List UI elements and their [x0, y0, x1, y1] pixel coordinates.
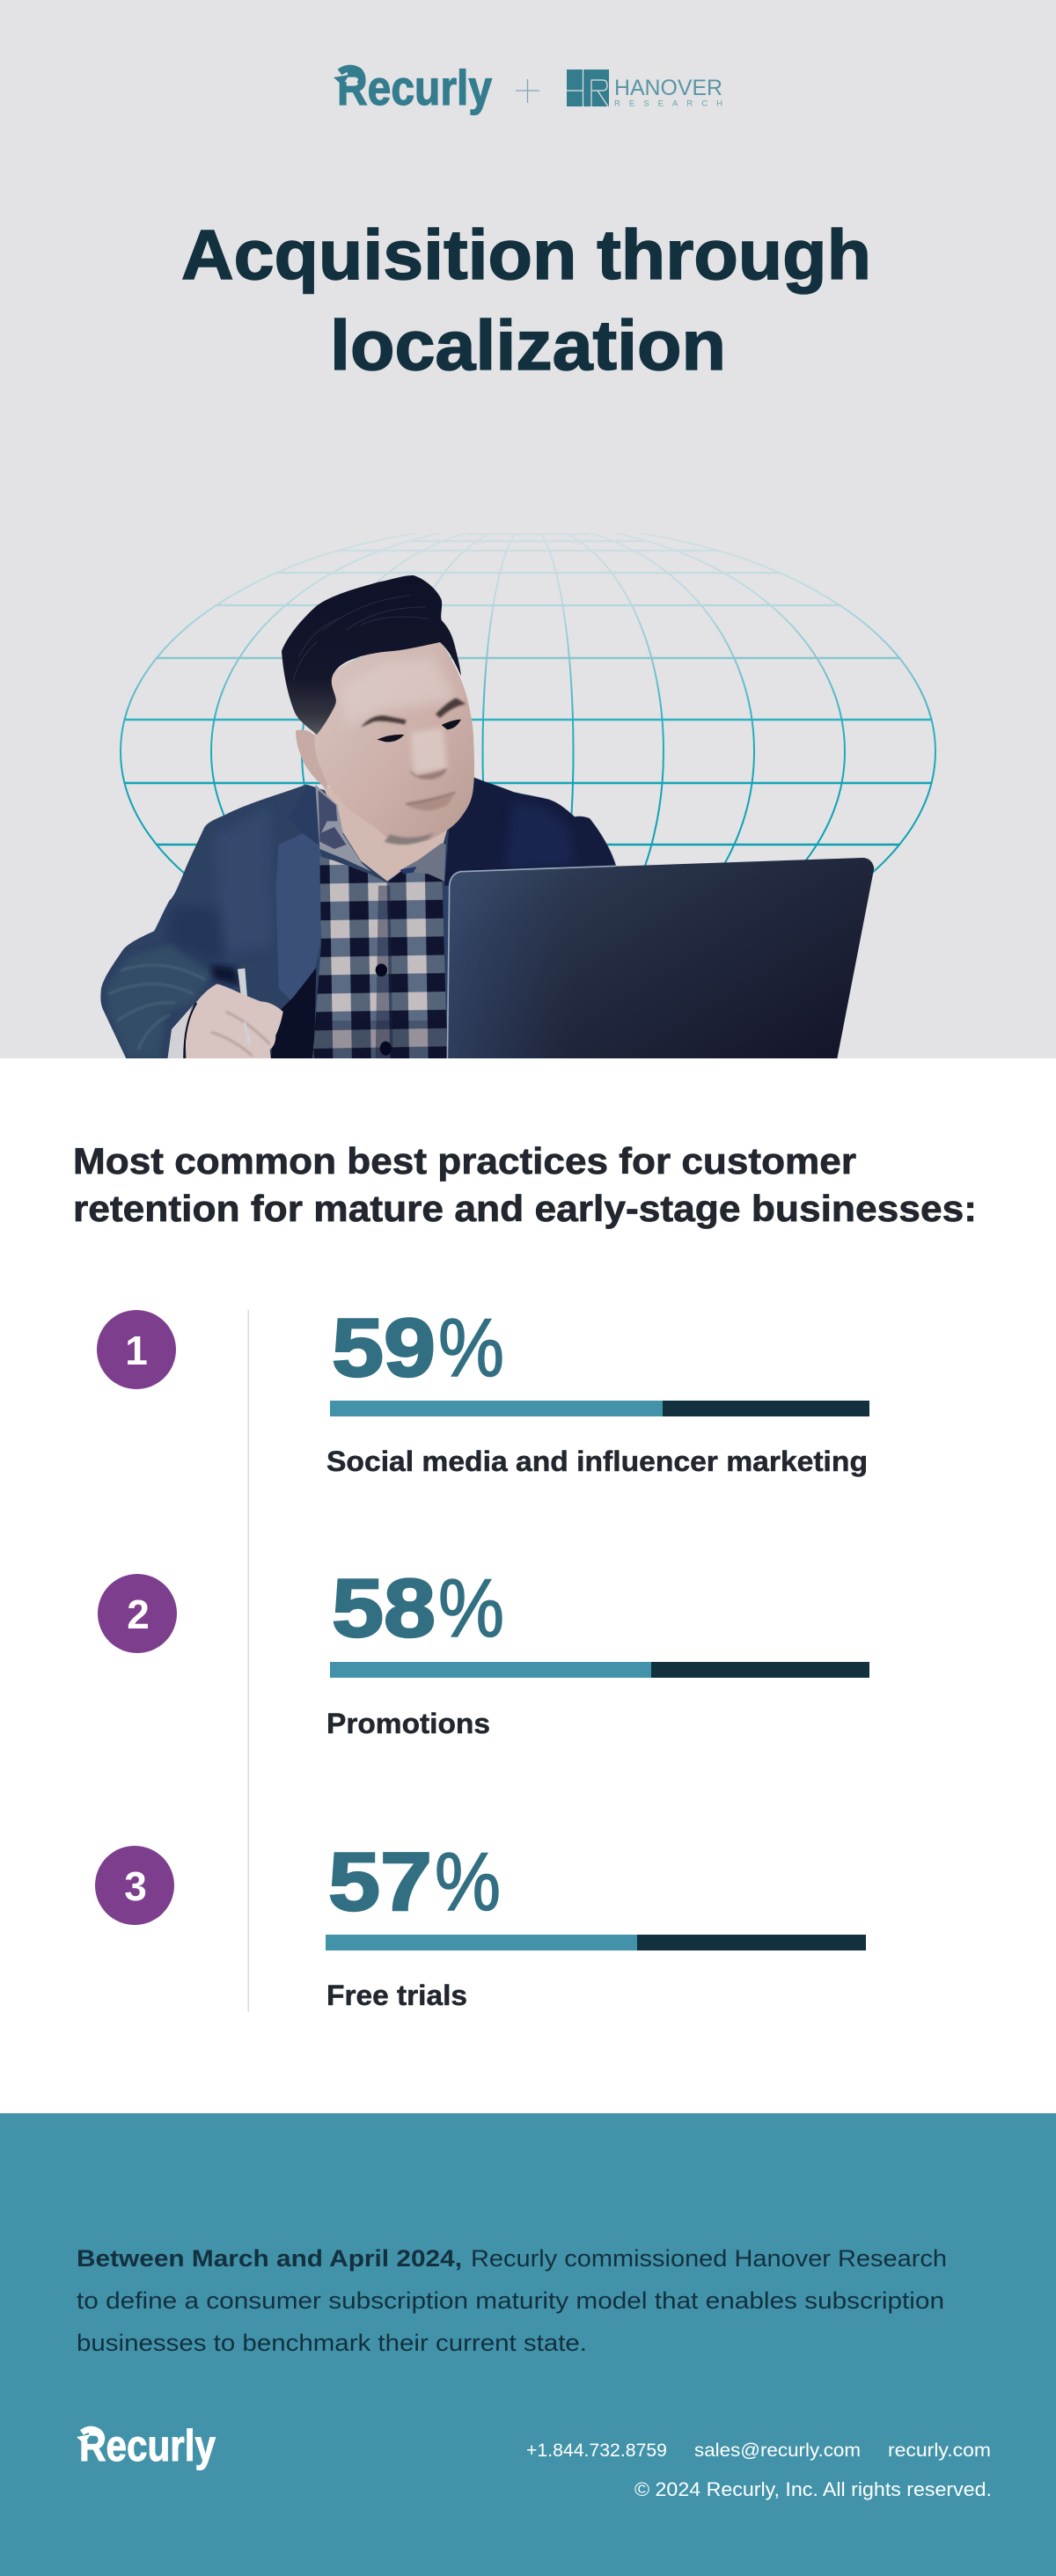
value 58%: 58	[332, 1562, 436, 1654]
jacket	[100, 778, 616, 1058]
ranked item 2	[98, 1562, 869, 1739]
logo: Recurly: Recurly	[337, 60, 492, 115]
ranked item 2: %	[438, 1562, 504, 1654]
divider line	[248, 1310, 249, 2012]
methodology text: Recurly commissioned Hanover Research	[471, 2245, 947, 2272]
label: social media: Social media and influencer marketing	[326, 1445, 868, 1477]
logo: Recurly white: Recurly	[79, 2421, 216, 2470]
methodology text: Between March and April 2024,	[77, 2245, 462, 2272]
photo: man with laptop	[100, 575, 874, 1062]
copyright: © 2024 Recurly, Inc. All rights reserved.	[634, 2478, 992, 2500]
laptop	[447, 858, 874, 1062]
number badge 2: 2	[127, 1592, 150, 1637]
progress bar 57%	[326, 1935, 866, 1950]
ranked item 1	[97, 1301, 869, 1477]
ranked item 3: %	[435, 1835, 501, 1928]
logo: Hanover Research	[567, 70, 722, 109]
title: Acquisition through	[181, 216, 871, 294]
hair	[282, 575, 461, 735]
contact details: sales@recurly.com	[694, 2441, 861, 2461]
globe grid	[120, 533, 936, 874]
label: promotions: Promotions	[326, 1708, 490, 1739]
methodology text: businesses to benchmark their current state.	[77, 2330, 587, 2356]
value 57%: 57	[328, 1835, 432, 1928]
hand with pen	[167, 969, 283, 1062]
neck	[323, 786, 449, 882]
collar	[315, 785, 446, 882]
title: localization	[330, 306, 726, 384]
face	[314, 640, 474, 845]
heading	[73, 1140, 977, 1229]
progress bar 58%	[330, 1662, 869, 1678]
ranked item 1: %	[438, 1301, 504, 1394]
heading: Most common best practices for customer	[73, 1140, 856, 1182]
shirt	[312, 853, 447, 1062]
contact details	[526, 2441, 991, 2461]
icon: plus sign	[516, 79, 539, 103]
progress bar 59%	[330, 1401, 869, 1416]
logo: Hanover Research: RESEARCH	[614, 99, 722, 109]
panel: header background	[0, 0, 1056, 1058]
number badge 1	[97, 1310, 176, 1389]
logo: Hanover Research: HANOVER	[614, 76, 722, 100]
contact details: recurly.com	[888, 2441, 991, 2461]
methodology text	[77, 2245, 947, 2356]
ear	[296, 730, 332, 789]
title	[181, 216, 871, 384]
methodology text: to define a consumer subscription maturity model that enables subscription	[77, 2287, 944, 2314]
panel: footer	[0, 2113, 1056, 2576]
number badge 3	[95, 1846, 174, 1925]
value 59%: 59	[332, 1301, 436, 1394]
number badge 3: 3	[124, 1863, 147, 1909]
label: free trials: Free trials	[326, 1980, 467, 2011]
number badge 1: 1	[125, 1328, 148, 1373]
heading: retention for mature and early-stage businesses:	[73, 1188, 977, 1229]
number badge 2	[98, 1574, 177, 1653]
contact details: +1.844.732.8759	[526, 2441, 667, 2461]
ranked item 3	[95, 1835, 866, 2011]
